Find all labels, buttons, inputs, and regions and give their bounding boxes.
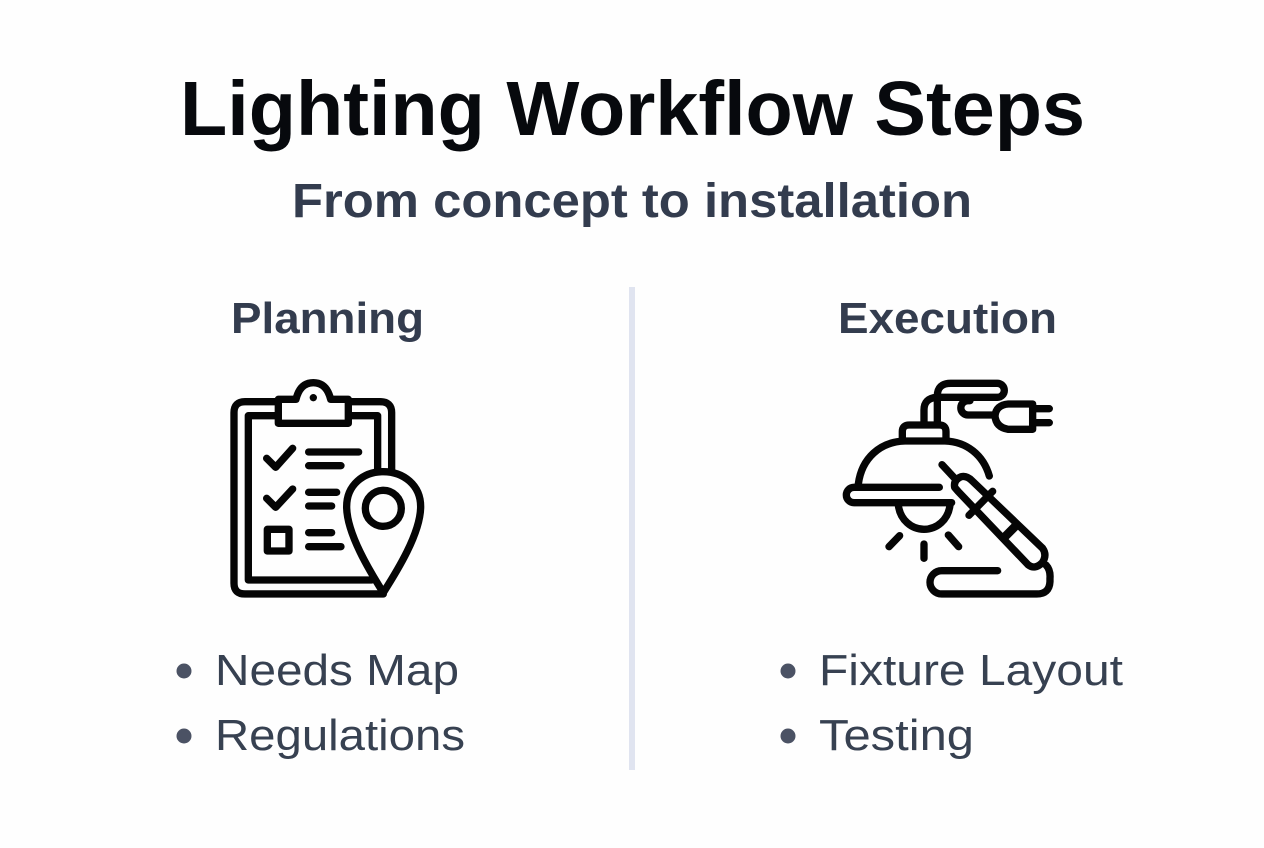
icon: clipboard checklist with location pin [234, 383, 421, 594]
title: Lighting Workflow Steps [180, 66, 1085, 152]
list: execution items [780, 646, 1123, 760]
heading: planning: Planning [231, 294, 424, 343]
list: execution items: Testing [819, 711, 974, 760]
heading: execution: Execution [838, 294, 1057, 343]
list: planning items: Regulations [215, 711, 465, 760]
subtitle: From concept to installation [292, 175, 972, 228]
list: planning items: Needs Map [215, 646, 459, 695]
list: execution items: Fixture Layout [819, 646, 1123, 695]
icon: lamp with soldering pen and plug [846, 383, 1050, 594]
list: planning items [176, 646, 465, 760]
panel: execution [780, 294, 1123, 760]
panel: planning [176, 294, 465, 760]
center divider [629, 287, 635, 770]
